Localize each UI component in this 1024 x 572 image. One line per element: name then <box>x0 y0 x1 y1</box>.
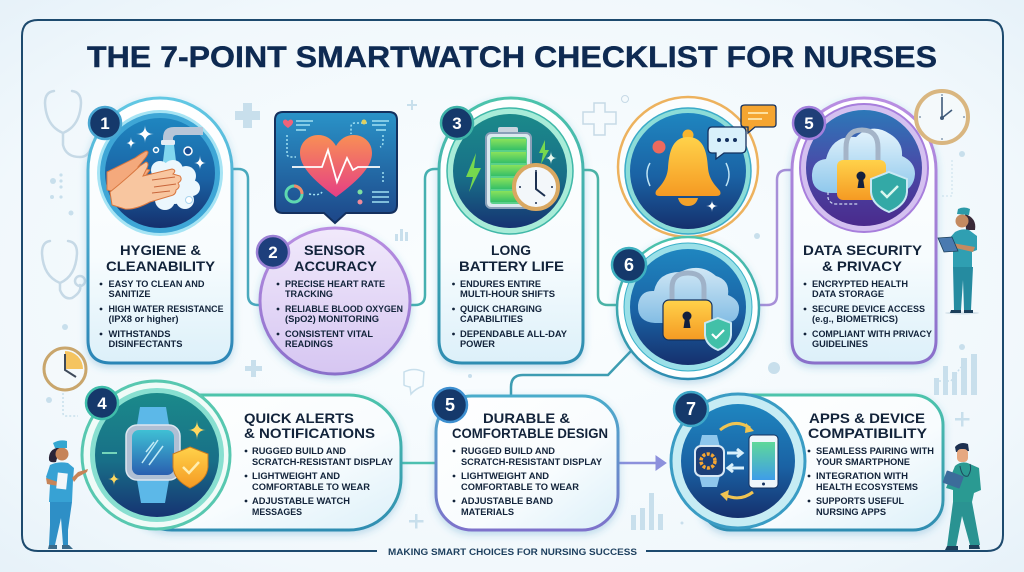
bullet list: ENCRYPTED HEALTH <box>812 279 908 289</box>
icon: clock left <box>44 348 86 390</box>
heading: & PRIVACY <box>822 258 903 274</box>
icon: cloud and padlock <box>638 268 739 350</box>
heading: & NOTIFICATIONS <box>244 425 375 441</box>
heading <box>452 410 608 441</box>
bullet list: DISINFECTANTS <box>108 339 182 349</box>
bullet list: HIGH WATER RESISTANCE <box>108 304 224 314</box>
bullet list: LIGHTWEIGHT AND <box>252 471 341 481</box>
heading <box>294 242 378 274</box>
bullet list: MESSAGES <box>252 507 302 517</box>
badge 6: 6 <box>624 255 634 275</box>
badge 5 <box>793 107 825 139</box>
heading: COMFORTABLE DESIGN <box>452 425 608 441</box>
bullet list: YOUR SMARTPHONE <box>816 457 910 467</box>
bullet list: CONSISTENT VITAL <box>285 329 374 339</box>
badge 6 <box>612 248 646 282</box>
bullet list: CAPABILITIES <box>460 314 523 324</box>
purple circle panel <box>260 228 410 374</box>
nurse: right <box>942 443 981 550</box>
bullet list: ENDURES ENTIRE <box>460 279 541 289</box>
bullet list: NURSING APPS <box>816 507 886 517</box>
bullet list: GUIDELINES <box>812 339 868 349</box>
bullet list: HEALTH ECOSYSTEMS <box>816 482 918 492</box>
bullet list: SANITIZE <box>108 289 150 299</box>
bullet list <box>100 279 224 349</box>
bullet list: MATERIALS <box>461 507 514 517</box>
connector 3 to 6 <box>583 170 618 305</box>
bullet list: ADJUSTABLE BAND <box>461 496 554 506</box>
icon: notification bell <box>618 97 776 237</box>
heading <box>244 410 375 441</box>
badge 2: 2 <box>268 243 278 262</box>
bullet list: LIGHTWEIGHT AND <box>461 471 550 481</box>
badge 2 <box>257 236 289 268</box>
badge 7: 7 <box>686 399 696 419</box>
bullet list: (SpO2) MONITORING <box>285 314 379 324</box>
bullet list: SEAMLESS PAIRING WITH <box>816 446 934 456</box>
icon: cloud lock shield <box>800 104 928 232</box>
panel: battery life <box>439 98 583 363</box>
panel: apps compatibility <box>671 392 943 530</box>
bullet list: DATA STORAGE <box>812 289 884 299</box>
heading: QUICK ALERTS <box>244 410 354 426</box>
connector 2 to 3 <box>410 169 441 305</box>
bullet list: POWER <box>460 339 495 349</box>
connector 6 to durable <box>511 352 630 396</box>
icon: smartwatch and shield <box>82 381 230 529</box>
bullet list: INTEGRATION WITH <box>816 471 908 481</box>
heading <box>803 242 923 274</box>
background decorations <box>42 91 628 298</box>
panel: sensor accuracy <box>257 112 410 374</box>
connector 5 to 6 <box>760 170 792 305</box>
heading <box>808 410 928 441</box>
bullet list: (IPX8 or higher) <box>108 314 178 324</box>
connectors <box>232 169 792 470</box>
badge 5 durable <box>433 388 467 422</box>
badge 4 <box>86 387 118 419</box>
panel: quick alerts <box>82 381 401 530</box>
bullet list: SUPPORTS USEFUL <box>816 496 904 506</box>
bullet list: COMFORTABLE TO WEAR <box>252 482 371 492</box>
panel: circle 6 lock <box>617 237 759 379</box>
bullet list: PRECISE HEART RATE <box>285 279 385 289</box>
heading: ACCURACY <box>294 258 378 274</box>
bullet list: EASY TO CLEAN AND <box>108 279 205 289</box>
icon: hand washing <box>97 110 223 236</box>
connector 1 to 2 <box>232 169 264 305</box>
bullet list: QUICK CHARGING <box>460 304 542 314</box>
connector 4 to durable <box>401 462 436 464</box>
bullet list: SCRATCH-RESISTANT DISPLAY <box>252 457 393 467</box>
bullet list: SCRATCH-RESISTANT DISPLAY <box>461 457 602 467</box>
icon: battery and clock <box>447 108 573 234</box>
heading: APPS & DEVICE <box>809 410 925 426</box>
icon: clock top right <box>916 91 968 143</box>
arrow to 7 <box>620 456 666 470</box>
badge 3: 3 <box>452 114 462 133</box>
heading: COMPATIBILITY <box>808 425 928 441</box>
badge 4: 4 <box>97 394 107 413</box>
badge 1 <box>89 107 121 139</box>
heading: CLEANABILITY <box>106 258 216 274</box>
bullet list: SECURE DEVICE ACCESS <box>812 304 925 314</box>
bullet list: MULTI-HOUR SHIFTS <box>460 289 555 299</box>
footer text: MAKING SMART CHOICES FOR NURSING SUCCESS <box>388 547 637 558</box>
bullet list: COMPLIANT WITH PRIVACY <box>812 329 932 339</box>
heading: DATA SECURITY <box>803 242 923 258</box>
bullet list: COMFORTABLE TO WEAR <box>461 482 580 492</box>
panel: data security <box>792 98 936 363</box>
bullet list: RUGGED BUILD AND <box>461 446 556 456</box>
bullet list <box>452 279 567 349</box>
title: THE 7-POINT SMARTWATCH CHECKLIST FOR NURSES <box>87 41 937 74</box>
bullet list: WITHSTANDS <box>108 329 170 339</box>
bullet list: READINGS <box>285 339 333 349</box>
badge 5: 5 <box>804 114 814 133</box>
icon: watch phone sync <box>671 394 805 528</box>
badge 1: 1 <box>100 114 110 133</box>
nurse: left <box>46 440 88 549</box>
icon: heart monitor card <box>275 112 397 223</box>
bullet list: (e.g., BIOMETRICS) <box>812 314 898 324</box>
badge 7 <box>674 392 708 426</box>
connector bell to 6 <box>687 226 689 248</box>
bullet list <box>245 446 393 517</box>
nurse: top right <box>938 208 979 314</box>
bullet list <box>453 446 602 517</box>
heading <box>459 242 564 274</box>
bullet list <box>804 279 932 349</box>
panel: durable design <box>433 388 618 530</box>
bullet list: RELIABLE BLOOD OXYGEN <box>285 304 403 314</box>
bullet list: RUGGED BUILD AND <box>252 446 347 456</box>
badge 3 <box>441 107 473 139</box>
panel: hygiene <box>88 98 232 363</box>
bullet list: ADJUSTABLE WATCH <box>252 496 350 506</box>
heading: DURABLE & <box>483 410 570 426</box>
heading <box>106 242 216 274</box>
heading: SENSOR <box>304 242 365 258</box>
badge 5 durable: 5 <box>445 395 455 415</box>
heading: LONG <box>491 242 531 258</box>
bullet list: TRACKING <box>285 289 333 299</box>
heading: BATTERY LIFE <box>459 258 564 274</box>
heading: HYGIENE & <box>120 242 201 258</box>
bullet list: DEPENDABLE ALL-DAY <box>460 329 567 339</box>
bullet list <box>808 446 934 517</box>
bullet list <box>277 279 403 349</box>
